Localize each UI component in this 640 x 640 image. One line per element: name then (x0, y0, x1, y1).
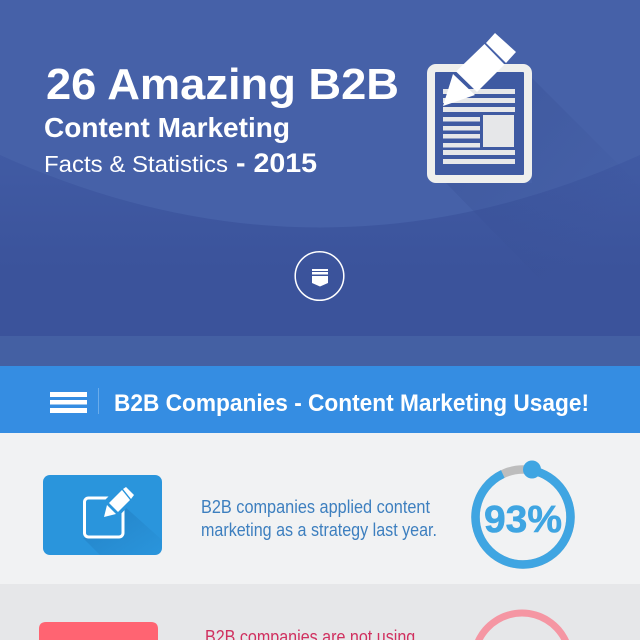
icon: blue edit card (43, 475, 162, 555)
title: - 2015 (236, 148, 317, 178)
panel: hero banner (0, 0, 640, 367)
panel: 93% statistic row (0, 433, 640, 584)
title: 26 Amazing B2B (46, 60, 399, 109)
section header: B2B Companies usage (0, 366, 640, 433)
ring chart: 93% (467, 460, 579, 573)
statistic description (201, 497, 437, 540)
icon: document with pencil (431, 33, 528, 179)
icon: scroll-down button (295, 252, 344, 300)
statistic description: B2B companies applied content (201, 497, 430, 517)
title (44, 60, 399, 178)
ring chart: pink (475, 610, 569, 640)
section heading: B2B Companies - Content Marketing Usage! (114, 390, 589, 417)
ring chart: 93%: 93% (484, 499, 562, 541)
icon: hamburger menu (50, 392, 87, 413)
statistic description: marketing as a strategy last year. (201, 520, 437, 540)
title: Content Marketing (44, 112, 290, 143)
icon: pink card (39, 622, 158, 640)
long shadow of document icon (446, 78, 640, 300)
title: Facts & Statistics (44, 151, 228, 177)
panel: non-users statistic row (0, 584, 640, 640)
